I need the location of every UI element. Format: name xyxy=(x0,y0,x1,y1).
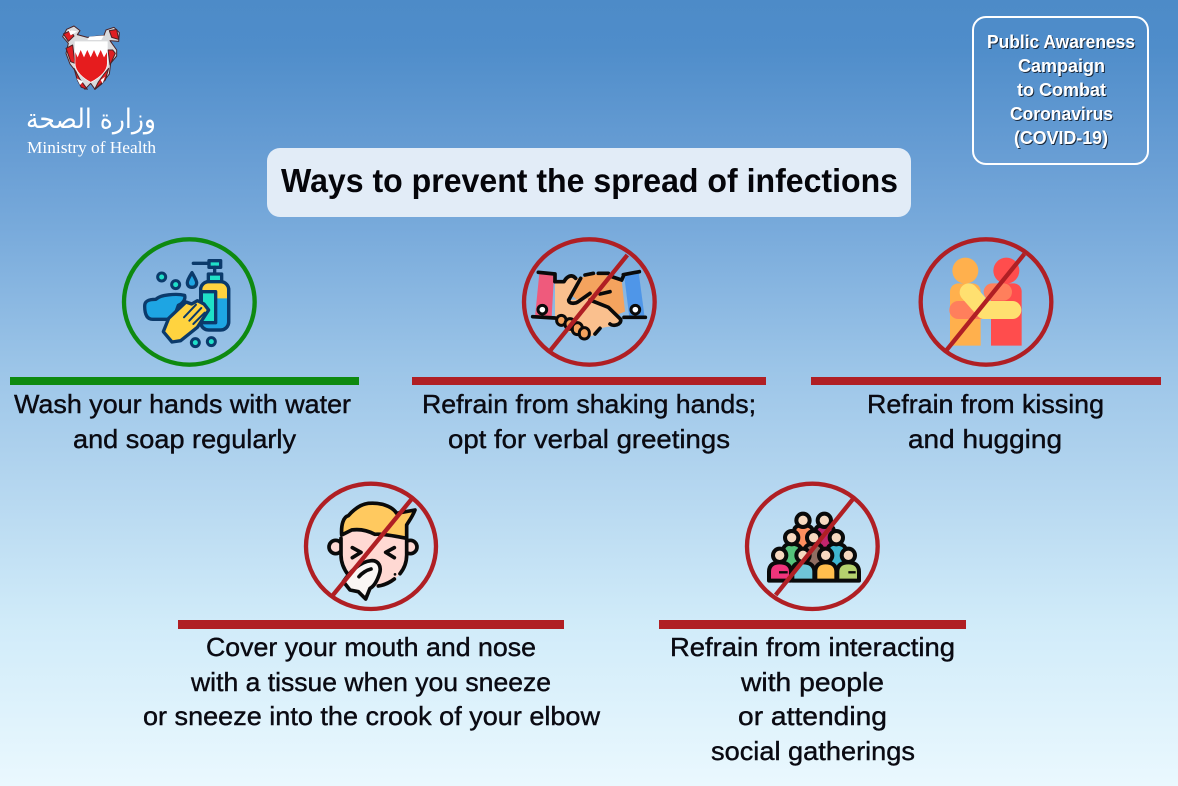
caption: or sneeze into the crook of your elbow xyxy=(143,701,600,731)
divider bar xyxy=(178,620,564,629)
icon: hand washing xyxy=(124,239,255,365)
caption: Wash your hands with water xyxy=(14,389,351,419)
campaign box: Public Awareness xyxy=(987,31,1135,52)
divider bar xyxy=(412,377,766,385)
panel: wash hands xyxy=(10,239,359,454)
title xyxy=(267,148,911,217)
caption: Refrain from interacting xyxy=(670,632,955,662)
caption: and hugging xyxy=(908,424,1062,454)
caption xyxy=(670,632,955,766)
panel: shaking hands xyxy=(412,239,766,454)
campaign box: Campaign xyxy=(1019,56,1106,77)
caption: with a tissue when you sneeze xyxy=(190,667,551,697)
campaign box: to Combat xyxy=(1018,80,1107,101)
icon: sneezing face prohibited xyxy=(306,484,436,609)
divider bar xyxy=(659,620,966,629)
caption xyxy=(143,632,600,731)
English name: Ministry of Health xyxy=(27,138,157,157)
campaign box: to Combat xyxy=(1017,79,1106,100)
campaign box: Campaign xyxy=(1018,55,1105,76)
caption xyxy=(422,389,756,454)
caption: Cover your mouth and nose xyxy=(206,632,536,662)
icon: handshake prohibited xyxy=(524,239,655,365)
campaign box: Public Awareness xyxy=(988,32,1136,53)
logo: Ministry of Health xyxy=(26,26,157,157)
caption: with people xyxy=(740,667,884,697)
divider bar xyxy=(811,377,1161,385)
caption: social gatherings xyxy=(711,736,915,766)
Arabic name: وزارة الصحة xyxy=(26,104,156,135)
icon: crowd prohibited xyxy=(747,484,878,609)
caption: Refrain from kissing xyxy=(867,389,1104,419)
caption: or attending xyxy=(738,701,887,731)
campaign box: Coronavirus xyxy=(1011,104,1114,125)
caption xyxy=(867,389,1104,454)
caption: and soap regularly xyxy=(73,424,296,454)
campaign box: (COVID-19) xyxy=(1014,127,1108,148)
icon: hug prohibited xyxy=(921,239,1051,365)
campaign box xyxy=(973,17,1148,164)
icon: Bahrain coat of arms xyxy=(63,26,119,89)
campaign box: Coronavirus xyxy=(1010,103,1113,124)
panel: social gatherings xyxy=(659,484,966,766)
shield xyxy=(75,42,107,82)
caption: Refrain from shaking hands; xyxy=(422,389,756,419)
divider bar xyxy=(10,377,359,385)
panel: cover mouth and nose xyxy=(143,484,600,731)
title: Ways to prevent the spread of infections xyxy=(281,162,898,199)
caption: opt for verbal greetings xyxy=(448,424,730,454)
panel: kissing and hugging xyxy=(811,239,1161,454)
caption xyxy=(14,389,351,454)
campaign box: (COVID-19) xyxy=(1015,128,1109,149)
